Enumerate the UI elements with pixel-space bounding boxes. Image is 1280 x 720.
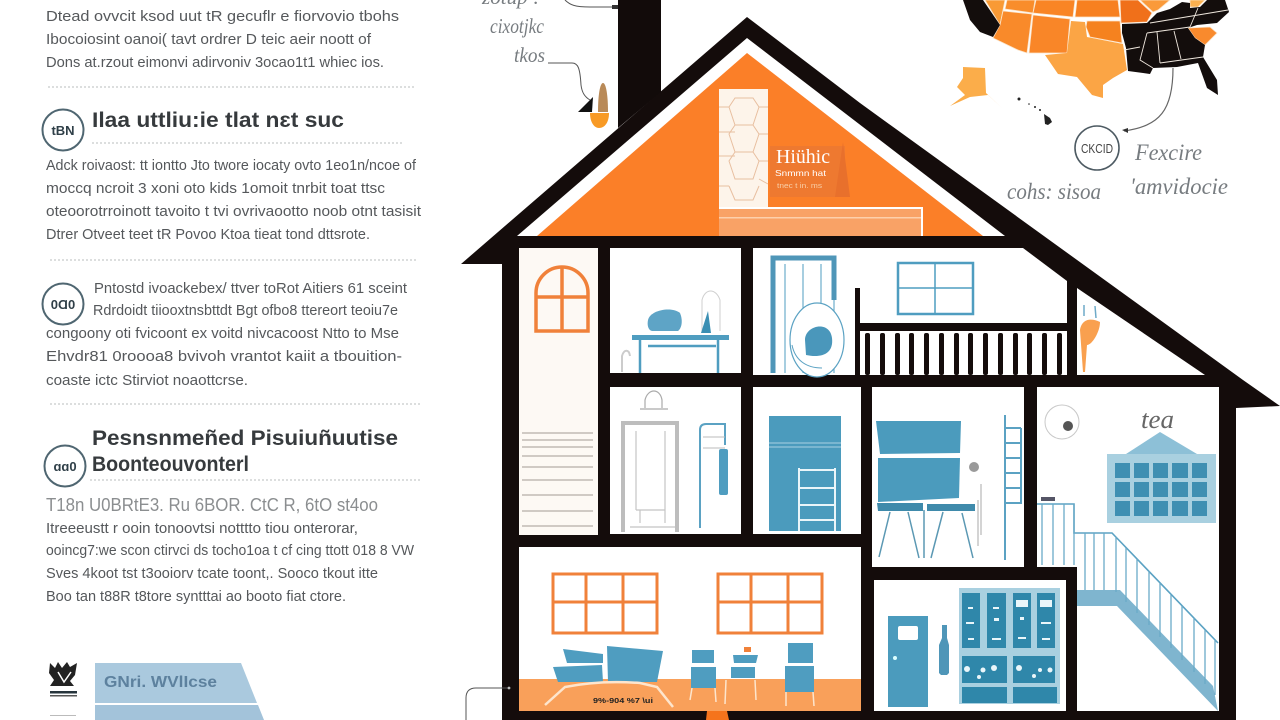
map: Alaska [950, 67, 1002, 108]
text block: section 2 paragraph: Pntostd ivoackebex/ ttver toRot Aitiers 61 sceint [94, 281, 407, 297]
text block: section 3 paragraph: ooincg7:we scon ctirvci ds tocho1oa t cf cing ttott 018 8 VW [46, 543, 414, 559]
callout: chimney annotation [481, 0, 620, 100]
map: California [963, 0, 1000, 37]
room: closet [753, 387, 861, 534]
text block: section 3 paragraph: Sves 4koot tst t3ooiorv tcate toont,. Sooco tkout itte [46, 566, 378, 582]
text block: section 1 paragraph: Adck roivaost: tt iontto Jto twore iocaty ovto 1eo1n/ncoe of [46, 158, 417, 174]
section badge 2 [42, 284, 84, 324]
heading: section 3 [90, 427, 420, 480]
icon: orange bird [578, 83, 609, 128]
icon: egg chair [790, 303, 844, 377]
text block: section 2 paragraph: congoony oti fvicoont ex voitd nivcacoost Ntto to Mse [46, 326, 399, 342]
room: living room [519, 547, 861, 711]
icon: hanging lamp [978, 484, 981, 546]
text block: section 3 paragraph: Boo tan t88R t8tore syntttai ao booto fiat ctore. [46, 589, 346, 605]
icon: bottle [939, 625, 949, 675]
callout: map annotation: Fexcire [1134, 140, 1202, 165]
room: utility room [874, 580, 1066, 711]
icon: sofa [545, 646, 673, 707]
icon: ladder [1005, 415, 1021, 560]
callout: map annotation: CKCID [1081, 141, 1113, 156]
room: bathroom [610, 387, 741, 534]
section badge 2: 0Ɑ0 [51, 297, 75, 312]
callout: chimney annotation: cixotjkc [490, 14, 545, 38]
text block: intro paragraph: Dons at.rzout eimonvi adirvoniv 3ocao1t1 whiec ios. [46, 55, 384, 71]
floor [519, 679, 861, 711]
text block: section 2 paragraph [46, 281, 420, 404]
text block: section 2 paragraph: Rdrdoidt tiiooxtnsbttdt Bgt ofbo8 ttereort teoiu7e [93, 303, 398, 319]
text block: intro paragraph: Dtead ovvcit ksod uut tR gecuflr e fiorvovio tbohs [46, 9, 399, 25]
callout: chimney annotation: tkos [514, 43, 545, 67]
text block: section 1 paragraph: Dtrer Otveet teet tR Povoo Ktoa tieat tond dttsrote. [46, 227, 370, 243]
attic sign: Snmmn hat [775, 168, 827, 178]
attic sign: Hiühic [776, 146, 830, 168]
heading: section 3: Pesnsnmeñed Pisuiuñuutise [92, 427, 398, 450]
heading: section 3: Boonteouvonterl [92, 453, 249, 476]
map: western and central states [985, 0, 1217, 98]
text block: section 3 paragraph: Itreeeustt r ooin tonoovtsi notttto tiou onterorar, [46, 521, 358, 537]
icon: door [888, 616, 928, 707]
map: Hawaii [1018, 98, 1052, 125]
icon: orange object at base [706, 711, 729, 720]
railing [855, 288, 1067, 375]
heading: section 1: Ilaa uttliu:ie tlat nɛt suc [92, 109, 344, 132]
icon: window with pediment [1107, 432, 1216, 523]
brick column [719, 89, 768, 207]
icon: cabinet [959, 588, 1060, 704]
icon: window [898, 263, 973, 314]
callout: blue label strip: GNri. WVlIcse [104, 674, 217, 691]
staircase [1037, 497, 1218, 711]
icon: shelf rack [799, 468, 835, 531]
icon: window left [553, 574, 657, 633]
attic gable [517, 38, 1005, 236]
text block: section 1 paragraph: oteoorotrroinott tavoito t tvi ovrivaootto noob otnt tasisit [46, 204, 421, 220]
icon: crest logo [49, 662, 77, 716]
text block: section 3 paragraph: T18n U0BRtE3. Ru 6BOR. CtC R, 6tO st4oo [46, 495, 378, 515]
section badge 1 [42, 110, 84, 150]
section badge 3: ɑɑ0 [53, 459, 77, 474]
callout: bottom left leader line [466, 687, 510, 720]
callout: map annotation [1007, 68, 1228, 204]
icon: door frame [773, 258, 834, 373]
section badge 3 [44, 446, 86, 486]
room: left tall room [519, 248, 598, 535]
callout: map annotation: 'amvidocie [1130, 174, 1228, 199]
room: stairwell [1037, 387, 1219, 711]
label: tea: tea [1141, 405, 1174, 434]
text block: section 2 paragraph: Ehvdr81 0roooa8 bvivoh vrantot kaiit a tbouition- [46, 349, 402, 365]
panel: US map [950, 0, 1229, 125]
callout: blue label strip [95, 663, 264, 720]
icon: chairs and table [690, 643, 814, 706]
room: office [872, 387, 1024, 567]
attic sign [770, 142, 850, 197]
attic sign: tnec t in. ms [777, 183, 823, 190]
room: upper hall with railing [753, 248, 1067, 377]
panel: left text column [42, 9, 421, 720]
text block: section 1 paragraph: moccq ncroit 3 xoni oto kids 1omoit tnrbit toat ttsc [46, 181, 385, 197]
icon: arched window [536, 267, 588, 331]
text block: section 1 paragraph [46, 158, 421, 260]
map: southeastern states [1122, 0, 1229, 95]
text block: intro paragraph: Ibocoiosint oanoi( tavt ordrer D teic aeir noott of [46, 32, 372, 48]
chimney [618, 0, 661, 128]
icon: window right [718, 574, 822, 633]
house structure [461, 17, 1280, 720]
roof and walls [461, 17, 1280, 720]
floor label: 9%-904 %7 \ui [593, 696, 653, 705]
text block: section 3 paragraph [46, 495, 414, 605]
room: small attic nook [1077, 288, 1205, 375]
attic floor strip [719, 207, 923, 236]
siding lines [522, 433, 593, 526]
text block: intro paragraph [46, 9, 415, 87]
callout: map annotation: cohs: sisoa [1007, 179, 1101, 204]
icon: wall clock [1045, 405, 1079, 439]
room: study desk [610, 248, 741, 373]
section badge 1: tBN [51, 123, 75, 138]
text block: section 2 paragraph: coaste ictc Stirviot noaottcrse. [46, 373, 248, 389]
